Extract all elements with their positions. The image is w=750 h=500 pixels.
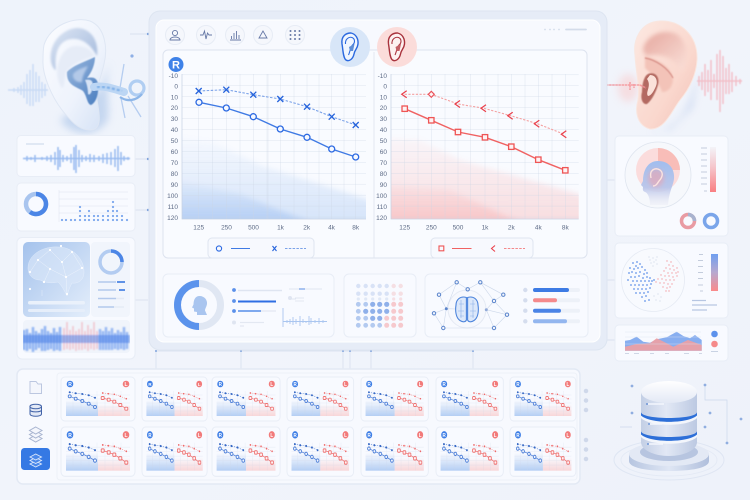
y axis labels: 10 [380, 94, 387, 102]
side panel with donut and bars [91, 242, 130, 317]
thumbnail 1-5: R [368, 382, 371, 388]
y axis labels: 0 [174, 84, 178, 90]
thumbnail 1-7: R [516, 382, 520, 388]
thumbnail 1-3: R [219, 382, 222, 388]
thumbnail 1-7 [510, 377, 576, 421]
y axis labels: 20 [380, 105, 387, 112]
badge: R: R [172, 60, 180, 72]
panel: audiogram container [163, 50, 587, 258]
x axis labels: 500 [248, 224, 259, 232]
y axis labels: 110 [377, 204, 387, 211]
thumbnail 2-7: L [566, 433, 569, 439]
thumbnail 2-5: R [368, 433, 371, 439]
thumbnails row 2 [61, 427, 576, 476]
panel: brain network and bars [425, 274, 588, 337]
thumbnail 1-2: L [198, 382, 201, 387]
thumbnail 2-3: R [219, 433, 222, 439]
thumbnail 1-3 [212, 377, 280, 421]
y axis labels: -10 [378, 73, 387, 80]
line: air conduction dashed [402, 91, 566, 138]
thumbnail 2-3: L [270, 433, 273, 439]
panel: dot matrix [344, 274, 416, 337]
y axis labels: 80 [171, 171, 178, 178]
thumbnail 2-7 [510, 427, 576, 476]
thumbnail 1-6: R [443, 382, 446, 388]
icon: cochlea [94, 54, 144, 118]
thumbnail 2-2: R [148, 433, 152, 439]
chart: left ear audiogram [376, 73, 588, 258]
connector lines [126, 33, 620, 369]
x axis labels: 4k [535, 224, 542, 232]
chart: mini donuts [682, 214, 718, 228]
icon: layers [30, 427, 42, 442]
chart: waveform [23, 145, 130, 173]
y axis labels: 110 [168, 204, 178, 211]
pagination dots [584, 391, 588, 459]
chart: horizontal bars [523, 288, 580, 323]
panel: area chart card [615, 325, 728, 361]
thumbnail 2-6: L [494, 433, 497, 439]
y axis labels: 120 [376, 215, 387, 222]
thumbnail 2-1: L [124, 433, 128, 439]
icon: database [30, 404, 42, 416]
thumbnail 2-3 [212, 427, 280, 476]
panel: right head map card [615, 136, 728, 236]
colour scale [698, 254, 718, 291]
thumbnails row 1 [61, 377, 576, 421]
y axis labels: 20 [171, 105, 178, 112]
thumbnail 2-1: R [68, 433, 72, 439]
thumbnail 2-7: R [516, 433, 520, 439]
x axis labels: 2k [508, 224, 515, 232]
sidebar icons [21, 382, 50, 470]
y axis labels: 100 [167, 193, 178, 200]
x axis labels: 125 [399, 224, 411, 232]
thumbnail 1-1: L [124, 382, 128, 388]
circuit traces [620, 385, 741, 443]
x axis labels: 1k [482, 224, 489, 232]
y axis labels [167, 73, 178, 222]
thumbnail 1-3: L [270, 382, 273, 388]
x axis labels: 250 [221, 224, 232, 232]
line: bone conduction solid [196, 99, 359, 160]
arrow: signal into right ear [606, 82, 646, 90]
panel: patient summary [163, 274, 334, 337]
chart: dot columns [59, 190, 128, 222]
x axis labels: 8k [352, 224, 360, 232]
icon: red ear tab [377, 27, 417, 67]
thumbnail 2-1 [61, 427, 135, 476]
thumbnail 2-4 [287, 427, 354, 476]
thumbnail 2-5: L [419, 433, 422, 439]
panel: waveform card [17, 136, 135, 176]
thumbnail 2-2 [142, 427, 207, 476]
y axis labels: 50 [171, 138, 178, 145]
chart: polar head map [625, 142, 691, 208]
legend: blue [208, 238, 314, 258]
chart: patient donut [178, 284, 220, 326]
thumbnail 1-4: L [344, 382, 347, 388]
y axis labels: 70 [171, 160, 178, 167]
thumbnail 1-7: L [566, 382, 569, 388]
badge: R [168, 57, 184, 72]
panel: audiogram library strip [17, 369, 586, 484]
thumbnail 2-5 [361, 427, 428, 476]
y axis labels: 60 [380, 149, 387, 156]
chart: blue and red spectrum [23, 320, 130, 353]
icon: folder [30, 382, 42, 394]
y axis labels: 80 [380, 171, 387, 178]
panel: brain analytics card [17, 238, 135, 359]
y axis labels: 50 [380, 138, 387, 145]
thumbnail 1-1: R [68, 382, 72, 388]
illustration: right ear [606, 21, 742, 132]
y axis labels: 120 [167, 215, 178, 222]
y axis labels: 30 [380, 116, 387, 123]
scale bar [701, 147, 716, 192]
legend: red [431, 238, 533, 258]
thumbnail 2-2: L [198, 433, 201, 439]
thumbnail 1-6: L [494, 382, 497, 388]
window dots [545, 28, 586, 30]
legend dots [711, 331, 718, 352]
thumbnail 1-1 [61, 377, 135, 421]
y axis labels: 0 [383, 84, 387, 90]
chart: donut [26, 194, 46, 214]
y axis labels [376, 73, 387, 222]
toolbar icons [166, 26, 304, 44]
x axis labels: 1k [277, 224, 285, 232]
waveform: sound entering left ear [8, 64, 48, 106]
chart: right ear audiogram [167, 57, 376, 258]
x axis labels [193, 224, 360, 232]
illustration: left ear with cochlea [8, 20, 144, 133]
icon: active layers tile [21, 448, 50, 470]
icon: blue ear tab [330, 27, 370, 67]
chart: scatter cluster [622, 248, 684, 312]
y axis labels: 60 [171, 149, 178, 156]
y axis labels: 90 [171, 182, 178, 189]
x axis labels [399, 224, 569, 232]
panel: main audiogram dashboard [149, 11, 607, 350]
thumbnail 1-2 [142, 377, 207, 421]
thumbnail 2-4: L [344, 433, 347, 439]
thumbnail 1-4: R [293, 382, 297, 388]
y axis labels: 90 [380, 182, 387, 189]
x axis labels: 8k [562, 224, 569, 232]
thumbnail 2-6 [436, 427, 503, 476]
y axis labels: 70 [380, 160, 387, 167]
illustration: database [614, 381, 741, 480]
thumbnail 1-6 [436, 377, 503, 421]
diagram: brain network [432, 281, 509, 330]
x axis labels: 125 [193, 224, 205, 232]
x axis labels: 500 [453, 224, 464, 232]
y axis labels: 40 [171, 127, 178, 134]
brain network image [23, 242, 90, 317]
thumbnail 1-4 [287, 377, 354, 421]
y axis labels: 30 [171, 116, 178, 123]
list rows [232, 290, 282, 326]
y axis labels: 100 [376, 193, 387, 200]
thumbnail 2-6: R [443, 433, 446, 439]
y axis labels: 10 [171, 94, 178, 102]
x axis labels: 4k [328, 224, 336, 232]
panel: scatter card [615, 243, 728, 318]
thumbnail 1-5 [361, 377, 428, 421]
y axis labels: 40 [380, 127, 387, 134]
x axis labels: 2k [303, 224, 311, 232]
line: bone conduction solid [402, 106, 568, 173]
y axis labels: -10 [169, 73, 178, 80]
panel: donut and dot chart card [17, 183, 135, 231]
x axis labels: 250 [426, 224, 437, 232]
waveform: sound right of ear [697, 50, 742, 112]
chart: overlapping areas [625, 332, 702, 354]
line: air conduction dashed [196, 87, 359, 128]
thumbnail 2-4: R [293, 433, 297, 439]
thumbnail 1-5: L [419, 382, 422, 388]
mini waveform and controls [283, 289, 327, 327]
thumbnail 1-2: R [148, 382, 152, 387]
